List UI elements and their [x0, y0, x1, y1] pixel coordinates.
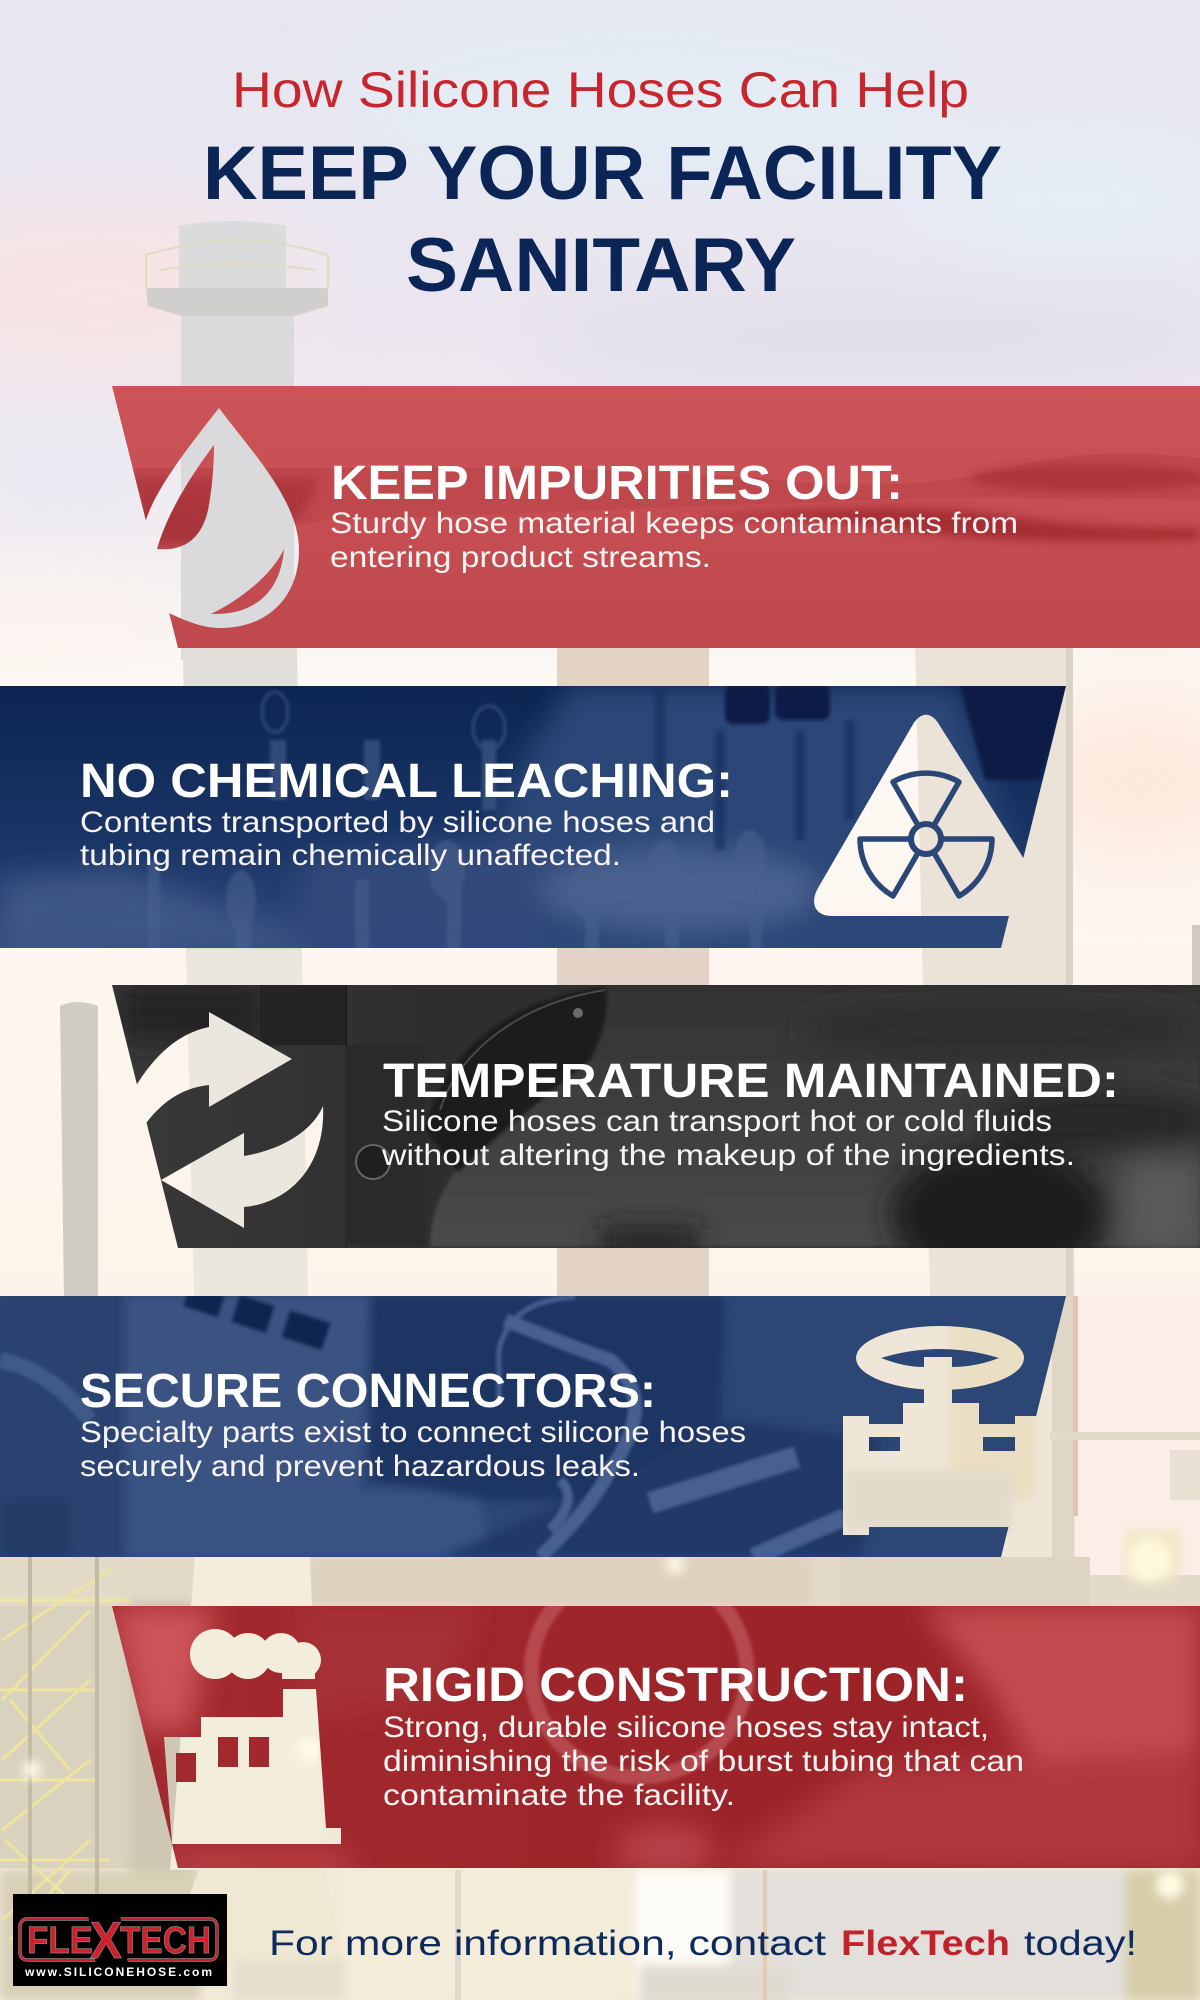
body text [80, 806, 715, 872]
title [203, 131, 1002, 308]
thin left chimney [60, 1002, 98, 1300]
body text: Silicone hoses can transport hot or cold fluids [382, 1105, 1052, 1138]
band with machinery photo and valve icon knocked out [0, 1285, 1070, 1560]
body text: Specialty parts exist to connect silicone hoses [80, 1416, 746, 1449]
panel: rigid construction [112, 1606, 1200, 1868]
body text [383, 1711, 1024, 1812]
right refinery columns [840, 1296, 1200, 1606]
heading: SECURE CONNECTORS: [80, 1365, 656, 1418]
body text: Contents transported by silicone hoses and [80, 806, 715, 839]
body text [381, 1105, 1075, 1172]
logo: FlexTech: X [90, 1912, 122, 1970]
band with gasket photo and factory icon knocked out [112, 1606, 1200, 1868]
footer call to action: today! [1024, 1924, 1137, 1963]
heading: NO CHEMICAL LEACHING: [80, 755, 733, 808]
body text: entering product streams. [330, 541, 711, 574]
body text: Strong, durable silicone hoses stay intact, [383, 1711, 989, 1744]
body text: Sturdy hose material keeps contaminants from [330, 507, 1018, 540]
band with water photo and drop icon knocked out [100, 386, 1200, 648]
footer call to action: FlexTech [841, 1924, 1010, 1963]
logo: FlexTech: www.SILICONEHOSE.com [24, 1965, 212, 1979]
logo: FlexTech: FLE [27, 1920, 93, 1962]
panel: keep impurities out [100, 386, 1200, 648]
heading: TEMPERATURE MAINTAINED: [383, 1055, 1119, 1108]
chimney left [146, 221, 328, 1300]
title: SANITARY [406, 223, 796, 308]
body text [330, 507, 1018, 574]
subtitle: How Silicone Hoses Can Help [232, 62, 969, 118]
body text: tubing remain chemically unaffected. [80, 839, 621, 872]
panel: temperature maintained [112, 985, 1200, 1248]
heading: KEEP IMPURITIES OUT: [331, 457, 903, 510]
panel: secure connectors [0, 1285, 1070, 1560]
body text: securely and prevent hazardous leaks. [80, 1450, 640, 1483]
band with gauge photo and arrows icon knocked out [112, 985, 1200, 1248]
heading: RIGID CONSTRUCTION: [383, 1659, 968, 1712]
tower right [915, 640, 1200, 1300]
title: KEEP YOUR FACILITY [203, 131, 1002, 216]
body text: diminishing the risk of burst tubing that can [383, 1745, 1024, 1778]
body text: contaminate the facility. [383, 1779, 735, 1812]
logo: FlexTech [13, 1894, 227, 1986]
panel: no chemical leaching [0, 684, 1070, 960]
body text: without altering the makeup of the ingredients. [381, 1139, 1075, 1172]
footer call to action [269, 1924, 1137, 1963]
band with test tube photo and hazard icon knocked out [0, 684, 1070, 960]
logo: FlexTech: TECH [120, 1920, 211, 1962]
chimney centre [557, 640, 709, 1330]
footer call to action: For more information, contact [269, 1924, 826, 1963]
body text [80, 1416, 746, 1483]
factory scene [0, 1296, 1200, 2000]
